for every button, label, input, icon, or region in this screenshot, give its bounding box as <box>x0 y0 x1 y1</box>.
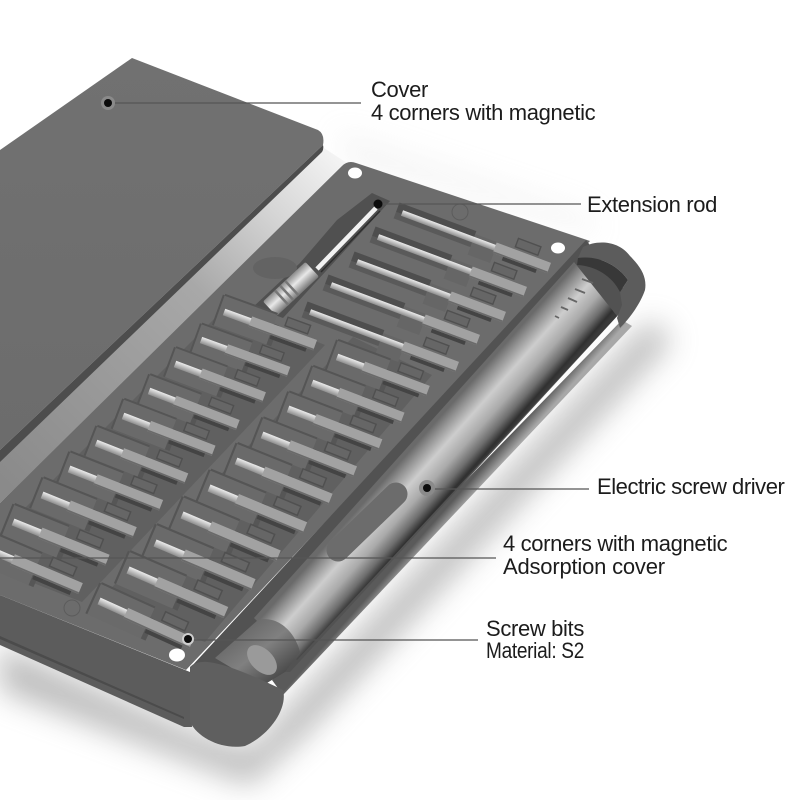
callout: screw bits: Screw bits <box>486 616 584 641</box>
long bits <box>299 195 555 382</box>
screw bits: right column <box>85 338 434 659</box>
panel: cover <box>0 58 323 462</box>
callout: adsorption cover: Adsorption cover <box>503 554 665 579</box>
top end cap <box>577 243 645 328</box>
rail under driver <box>272 320 632 695</box>
callout: extension rod: Extension rod <box>587 192 717 217</box>
shadows under the kit <box>0 130 672 785</box>
ticks <box>555 279 593 318</box>
callout: electric screw driver <box>419 474 784 499</box>
panel: tray <box>0 162 590 727</box>
right bit recess <box>97 337 432 642</box>
callout: screw bits: Material: S2 <box>486 638 584 663</box>
callout: cover: 4 corners with magnetic <box>371 100 596 125</box>
callout: extension rod <box>374 192 717 217</box>
holes in tray <box>64 168 565 662</box>
front wall <box>0 595 192 727</box>
callout: electric screw driver: Electric screw driver <box>597 474 784 499</box>
callout: adsorption cover: 4 corners with magnetic <box>503 531 728 556</box>
callout: adsorption cover <box>0 531 728 579</box>
screw bits: left column <box>0 293 321 604</box>
callout: cover: Cover <box>371 77 428 102</box>
pill slot <box>338 494 396 550</box>
electric screw driver <box>190 240 632 686</box>
gap between cover and tray <box>0 148 347 503</box>
extension rod <box>253 193 390 318</box>
left bit recess <box>0 305 325 602</box>
bottom end cap <box>190 662 284 747</box>
callout: cover <box>101 77 596 125</box>
callout: screw bits <box>182 616 584 663</box>
neck <box>215 619 300 686</box>
